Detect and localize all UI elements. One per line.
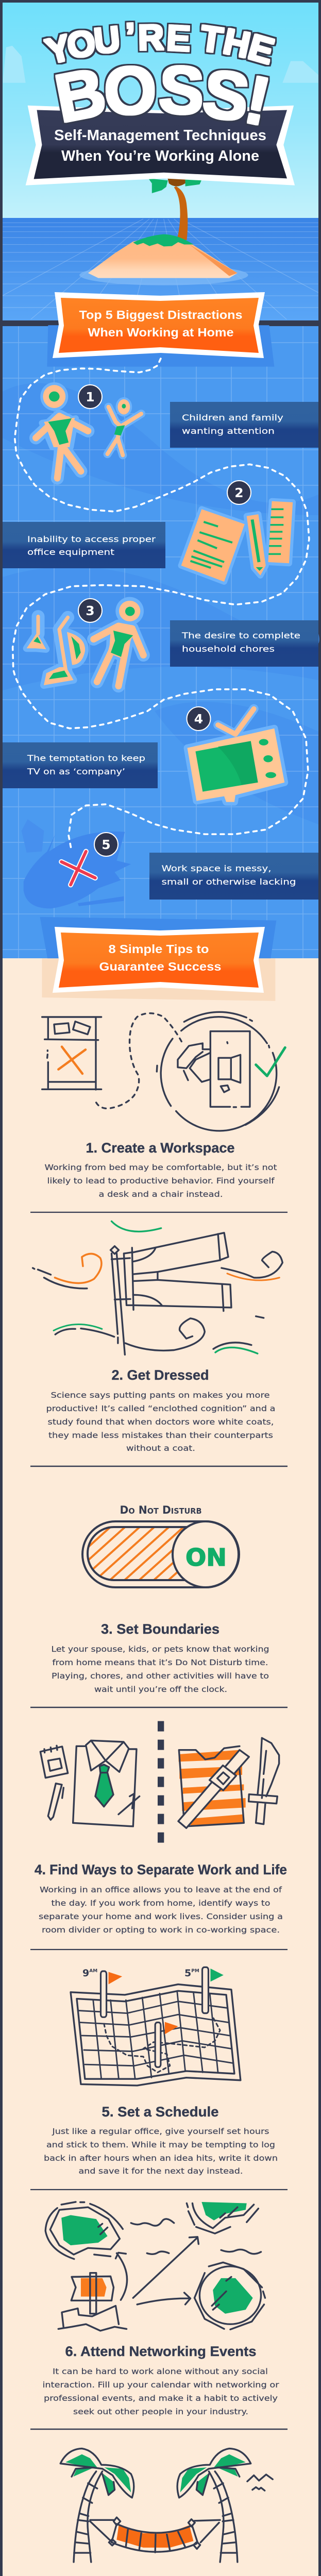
number badge 4: 4 (194, 711, 203, 726)
section: cream paper background (3, 958, 318, 2576)
text: separate work and life: room divider or opting to work in co-working space. (42, 1925, 280, 1935)
label: children and family: Children and family (182, 413, 283, 422)
text: separate work and life: separate your home and work lives. Consider using a (39, 1912, 283, 1921)
text: get dressed: study found that when doctors wore white coats, (47, 1417, 274, 1427)
text: set boundaries: from home means that it’s Do Not Disturb time. (53, 1658, 268, 1667)
section: blue map background (3, 326, 319, 958)
text: set boundaries: Playing, chores, and other activities will have to (52, 1671, 269, 1681)
treasure trail: dashed path (13, 359, 309, 852)
banner: 8 simple tips: 8 Simple Tips to (108, 942, 209, 956)
heading: create a workspace: 1. Create a Workspace (86, 1140, 235, 1156)
text: create a workspace: likely to lead to productive behavior. Find yourself (47, 1176, 275, 1185)
banner: top 5 distractions: Top 5 Biggest Distractions (79, 308, 242, 321)
label: do not disturb: Do Not Disturb (120, 1504, 202, 1516)
label: office equipment (3, 522, 165, 568)
label: 5 PM: 5 (184, 1968, 191, 1979)
text: attend networking events: professional events, and make it a habit to actively (44, 2394, 278, 2403)
icon: schedule map (71, 1967, 241, 2086)
icon: pants on a flagpole (33, 1222, 282, 1354)
text: get dressed (46, 1391, 275, 1453)
heading: separate work and life: 4. Find Ways to Separate Work and Life (35, 1862, 287, 1877)
icon: television (188, 709, 284, 802)
text: attend networking events: seek out other people in your industry. (73, 2407, 248, 2416)
number badge 3 (78, 599, 102, 622)
title: YOU’RE THE (42, 15, 278, 72)
heading: set a schedule: 5. Set a Schedule (102, 2104, 218, 2120)
label: household chores: household chores (182, 644, 275, 654)
heading: attend networking events: 6. Attend Networking Events (65, 2344, 257, 2359)
text: get dressed: Science says putting pants on makes you more (50, 1391, 270, 1400)
label: children and family (170, 402, 318, 448)
text: set a schedule: and save it for the next day instead. (78, 2166, 243, 2176)
text: attend networking events: interaction. Fill up your calendar with networking or (42, 2380, 279, 2389)
label: children and family: wanting attention (182, 426, 275, 436)
text: attend networking events (42, 2367, 279, 2416)
heading: get dressed: 2. Get Dressed (111, 1367, 209, 1383)
banner: top 5 distractions: When Working at Home (88, 326, 234, 339)
label: TV as company (3, 742, 158, 788)
treasure blob under X (22, 819, 131, 908)
label: messy work space (149, 853, 318, 900)
section: sky and sea header (3, 3, 318, 320)
icon: documents, pencil and ruler (181, 501, 293, 582)
text: set boundaries: Let your spouse, kids, or pets know that working (52, 1645, 269, 1654)
text: set a schedule: and stick to them. While it may be tempting to log (46, 2140, 275, 2149)
heading: set boundaries: 3. Set Boundaries (101, 1621, 219, 1637)
number badge 1 (78, 385, 102, 409)
banner: subtitle ribbon: When You’re Working Alone (61, 148, 259, 164)
label: household chores: The desire to complete (181, 631, 300, 640)
number badge 2: 2 (234, 485, 244, 500)
banner: top 5 distractions (53, 292, 265, 358)
banner shadow: 8 simple tips (40, 917, 276, 1001)
text: create a workspace: Working from bed may be comfortable, but it’s not (44, 1163, 277, 1172)
icon: person with household objects (27, 597, 144, 686)
title: BOSS! (49, 51, 277, 140)
icon: parent and child (36, 382, 141, 478)
right palm (177, 2449, 251, 2562)
icon: bed versus desk and door (42, 1012, 285, 1131)
label: TV as company: The temptation to keep (27, 753, 145, 763)
banner: 8 simple tips: Guarantee Success (99, 960, 222, 973)
text: create a workspace (44, 1163, 277, 1199)
number badge 5: 5 (102, 837, 111, 852)
label: 9 AM: AM (89, 1969, 97, 1974)
number badge 5 (94, 833, 118, 856)
banner: subtitle ribbon (26, 106, 295, 185)
number badge 3: 3 (86, 603, 95, 618)
text: separate work and life: Working in an office allows you to leave at the end of (40, 1885, 282, 1894)
text: create a workspace: a desk and a chair instead. (99, 1190, 223, 1199)
text: set a schedule: Just like a regular office, give yourself set hours (52, 2127, 269, 2136)
number badge 2 (227, 481, 251, 504)
label: messy work space: small or otherwise lacking (162, 877, 296, 887)
text: get dressed: without a coat. (126, 1444, 195, 1453)
icon: on switch (82, 1521, 239, 1587)
number badge 1: 1 (86, 389, 95, 404)
banner: top 5 distractions shadow (47, 325, 274, 367)
text: set boundaries: wait until you’re off the clock. (94, 1685, 227, 1694)
text: separate work and life (39, 1885, 283, 1935)
icon: on switch: ON (185, 1544, 227, 1571)
label: 9 AM: 9 (82, 1968, 89, 1979)
text: get dressed: they made less mistakes than their counterparts (48, 1431, 273, 1440)
text: set a schedule: back in after hours when an idea hits, write it down (44, 2154, 278, 2163)
icon: hammock between palm trees (60, 2449, 273, 2562)
label: office equipment: office equipment (27, 547, 114, 557)
banner: 8 simple tips (53, 927, 265, 993)
text: get dressed: productive! It’s called “enclothed cognition” and a (46, 1404, 275, 1413)
label: 5 PM: PM (191, 1969, 199, 1974)
number badge 4 (187, 707, 210, 731)
icon: boat sailing to islands (45, 2202, 265, 2331)
label: household chores (170, 620, 318, 667)
label: office equipment: Inability to access proper (27, 534, 156, 544)
label: TV as company: TV on as ‘company’ (27, 767, 125, 776)
text: set boundaries (52, 1645, 269, 1694)
text: attend networking events: It can be hard to work alone without any social (53, 2367, 268, 2376)
left palm (60, 2449, 134, 2562)
text: separate work and life: the day. If you work from home, identify ways to (52, 1899, 270, 1908)
icon: desert island with palm tree (79, 177, 248, 285)
text: set a schedule (44, 2127, 278, 2176)
divider bar (3, 320, 318, 326)
icon: work shirt versus pirate shirt (40, 1721, 279, 1843)
label: messy work space: Work space is messy, (162, 863, 271, 873)
title (42, 15, 278, 140)
icon: red X marks the spot (61, 852, 95, 885)
banner: subtitle ribbon: Self-Management Techniques (54, 127, 266, 144)
